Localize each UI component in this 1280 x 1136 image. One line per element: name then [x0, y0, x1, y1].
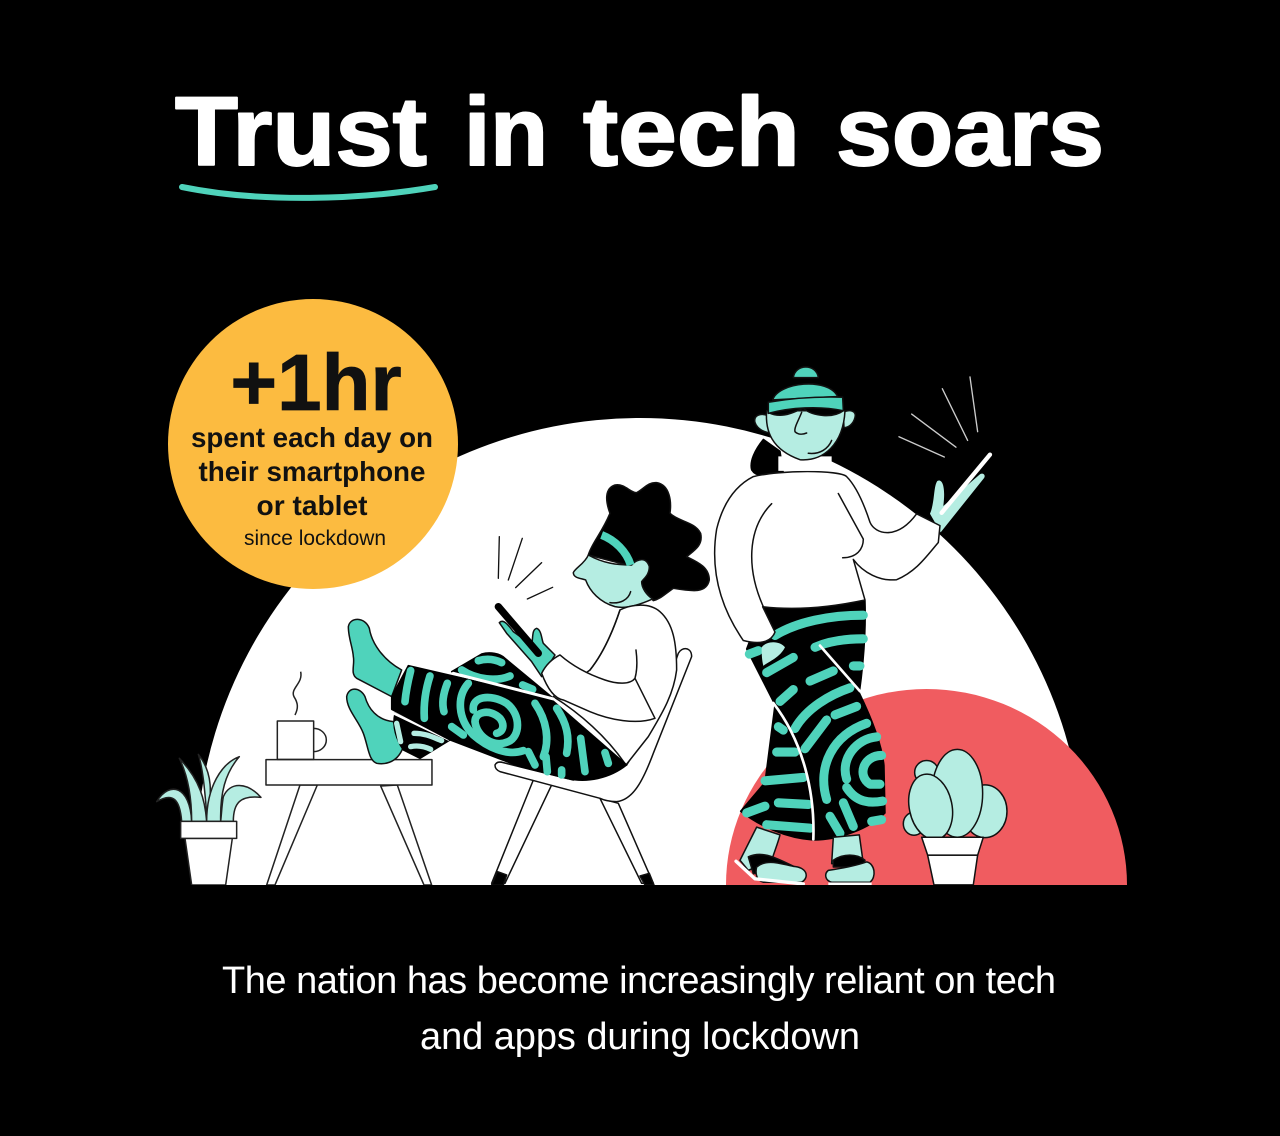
- skirt: [741, 601, 885, 840]
- face: [766, 411, 845, 460]
- trouser fingerprint pattern: [405, 659, 608, 775]
- plant pot: [181, 821, 237, 885]
- seated woman with phone: [347, 483, 709, 885]
- white line on trouser knee: [453, 673, 553, 699]
- left foot lower: [347, 689, 403, 764]
- face: [573, 555, 653, 607]
- legs: [740, 827, 863, 870]
- phone: [498, 607, 538, 653]
- hat pompom: [793, 367, 818, 378]
- hair: [588, 483, 709, 601]
- lower trouser leg: [394, 713, 450, 758]
- right foot upper: [348, 619, 402, 697]
- title: [175, 77, 1104, 186]
- upper knee of trousers: [452, 653, 553, 698]
- plant leaves: [157, 754, 261, 821]
- right sandal and foot: [826, 855, 874, 885]
- phone: [942, 455, 990, 513]
- callout text: their smartphone: [198, 456, 426, 487]
- white outline on lower leg: [395, 714, 448, 739]
- subtitle: and apps during lockdown: [420, 1016, 860, 1058]
- table legs: [267, 785, 432, 885]
- chair legs: [492, 780, 654, 885]
- title: tech: [583, 77, 800, 186]
- hair: [751, 439, 783, 476]
- phone signal rays: [899, 377, 978, 457]
- title underline: [182, 187, 435, 198]
- lower trouser stripes: [397, 723, 442, 749]
- floor band: [0, 885, 1280, 1136]
- sweater torso: [553, 605, 677, 765]
- raised hand: [930, 474, 985, 532]
- sweater: [715, 472, 940, 643]
- callout text: or tablet: [256, 490, 368, 521]
- plant left and coffee table: [157, 672, 432, 885]
- phone signal rays: [498, 537, 553, 599]
- title: soars: [836, 77, 1104, 186]
- steam: [293, 672, 301, 715]
- ears: [755, 411, 855, 433]
- hat dome: [773, 384, 838, 400]
- callout footnote: since lockdown: [244, 527, 386, 550]
- smile: [610, 592, 631, 603]
- white skirt folds: [773, 646, 860, 839]
- headband: [602, 535, 631, 565]
- cactus leaves: [903, 749, 1007, 844]
- callout circle: [168, 299, 458, 589]
- glasses: [768, 407, 843, 416]
- callout number: +1hr: [230, 338, 402, 427]
- callout disc: [168, 299, 458, 589]
- collar: [778, 456, 832, 471]
- hat band: [768, 397, 843, 413]
- skirt fingerprint pattern: [747, 615, 883, 833]
- callout text: spent each day on: [191, 422, 433, 453]
- cactus pot: [922, 837, 983, 885]
- table top: [266, 760, 432, 785]
- left sandal and foot: [736, 854, 806, 884]
- hand: [499, 621, 555, 677]
- subtitle: [222, 960, 1056, 1058]
- sweater fold lines: [752, 494, 863, 607]
- pocket hand: [762, 642, 785, 666]
- title: in: [464, 77, 548, 186]
- standing woman with phone: [715, 367, 1007, 885]
- title: Trust: [175, 77, 427, 186]
- callout text: [191, 422, 433, 521]
- red semicircle background: [726, 689, 1127, 885]
- chair seat and back: [495, 649, 692, 802]
- white dome background: [196, 418, 1084, 885]
- subtitle: The nation has become increasingly reliant on tech: [222, 960, 1056, 1002]
- sweater arm: [542, 650, 655, 721]
- neck line of sweater: [590, 610, 620, 670]
- coffee mug: [277, 721, 326, 759]
- main trouser leg: [392, 666, 627, 780]
- nose and smile: [795, 412, 832, 453]
